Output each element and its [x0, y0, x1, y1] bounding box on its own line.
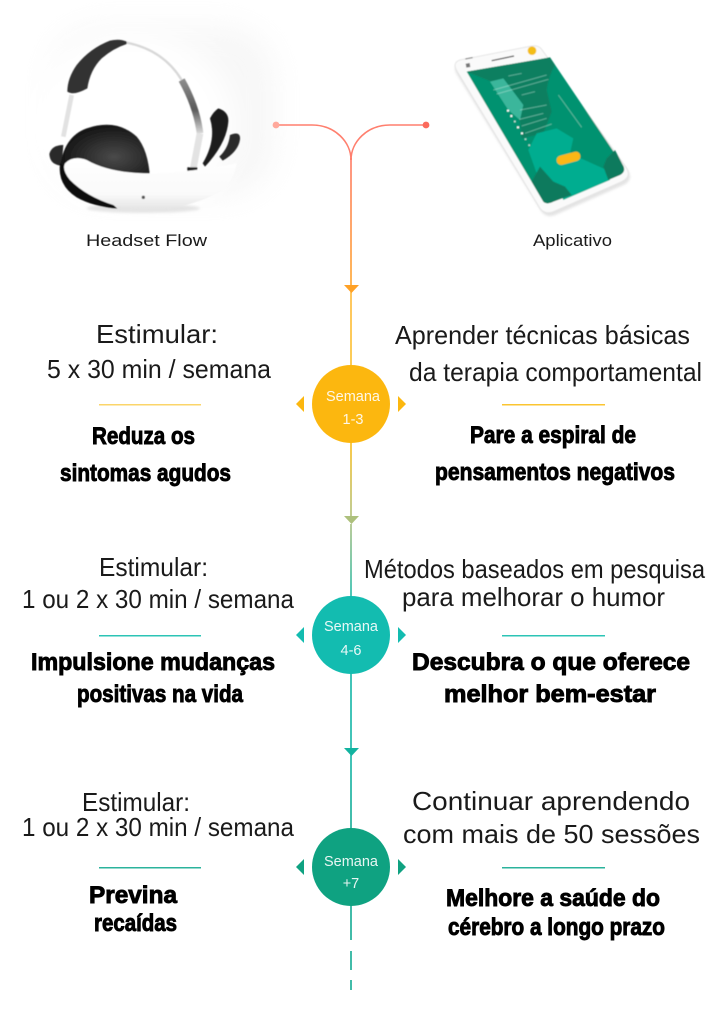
text block: week 1-3 right [395, 320, 702, 486]
text block: week 4-6 left: 1 ou 2 x 30 min / semana [22, 584, 294, 614]
text block: week +7 right [403, 786, 700, 941]
text block: week 1-3 right: da terapia comportamental [409, 357, 702, 387]
text block: week +7 right: cérebro a longo prazo [448, 914, 665, 941]
week 1-3 node: Semana [326, 389, 381, 405]
text block: week 1-3 left [47, 319, 272, 487]
week 1-3 node [296, 365, 406, 443]
text block: week 4-6 left: positivas na vida [77, 681, 244, 708]
text block: week 4-6 right: para melhorar o humor [402, 582, 665, 612]
timeline dashed end [350, 904, 352, 990]
week 1-3 node: 1-3 [343, 412, 363, 428]
week +7 node [296, 828, 406, 906]
text block: week +7 left [22, 787, 294, 937]
text block: week 1-3 left: sintomas agudos [60, 460, 231, 487]
text block: week 4-6 right: melhor bem-estar [444, 681, 656, 708]
arrow: into week 1-3 [344, 285, 359, 366]
text block: week +7 right: com mais de 50 sessões [403, 819, 700, 849]
week 4-6 node: 4-6 [341, 643, 361, 659]
arrow: into week 4-6 [344, 442, 359, 524]
week 4-6 node [296, 596, 406, 674]
text block: week 1-3 left: 5 x 30 min / semana [47, 354, 272, 384]
headset photo [25, 26, 275, 220]
text block: week +7 right: Melhore a saúde do [446, 885, 660, 912]
connector: device lines merging [273, 122, 429, 288]
text block: week 4-6 left: Impulsione mudanças [31, 649, 275, 676]
text block: week +7 left: Previna [89, 882, 178, 909]
label: Headset Flow: Headset Flow [86, 232, 207, 250]
week +7 node: +7 [343, 876, 359, 892]
text block: week 4-6 right [364, 554, 705, 708]
text block: week 1-3 left: Reduza os [92, 423, 195, 450]
text block: week +7 left: 1 ou 2 x 30 min / semana [22, 812, 294, 842]
text block: week 4-6 right: Descubra o que oferece [412, 649, 690, 676]
text block: week +7 left: recaídas [94, 910, 177, 937]
text block: week 4-6 left: Estimular: [99, 552, 208, 582]
week 4-6 node: Semana [324, 619, 379, 635]
text block: week 1-3 left: Estimular: [96, 319, 218, 349]
text block: week 1-3 right: pensamentos negativos [435, 459, 675, 486]
week +7 node: Semana [324, 854, 379, 870]
phone app mockup [455, 46, 630, 216]
text block: week 1-3 right: Pare a espiral de [470, 422, 636, 449]
text block: week +7 right: Continuar aprendendo [412, 786, 690, 816]
arrow: into week +7 [344, 524, 359, 830]
text block: week 1-3 right: Aprender técnicas básicas [395, 320, 690, 350]
text block: week +7 left: Estimular: [82, 787, 190, 817]
label: Aplicativo: Aplicativo [533, 232, 612, 250]
text block: week 4-6 left [22, 552, 294, 708]
